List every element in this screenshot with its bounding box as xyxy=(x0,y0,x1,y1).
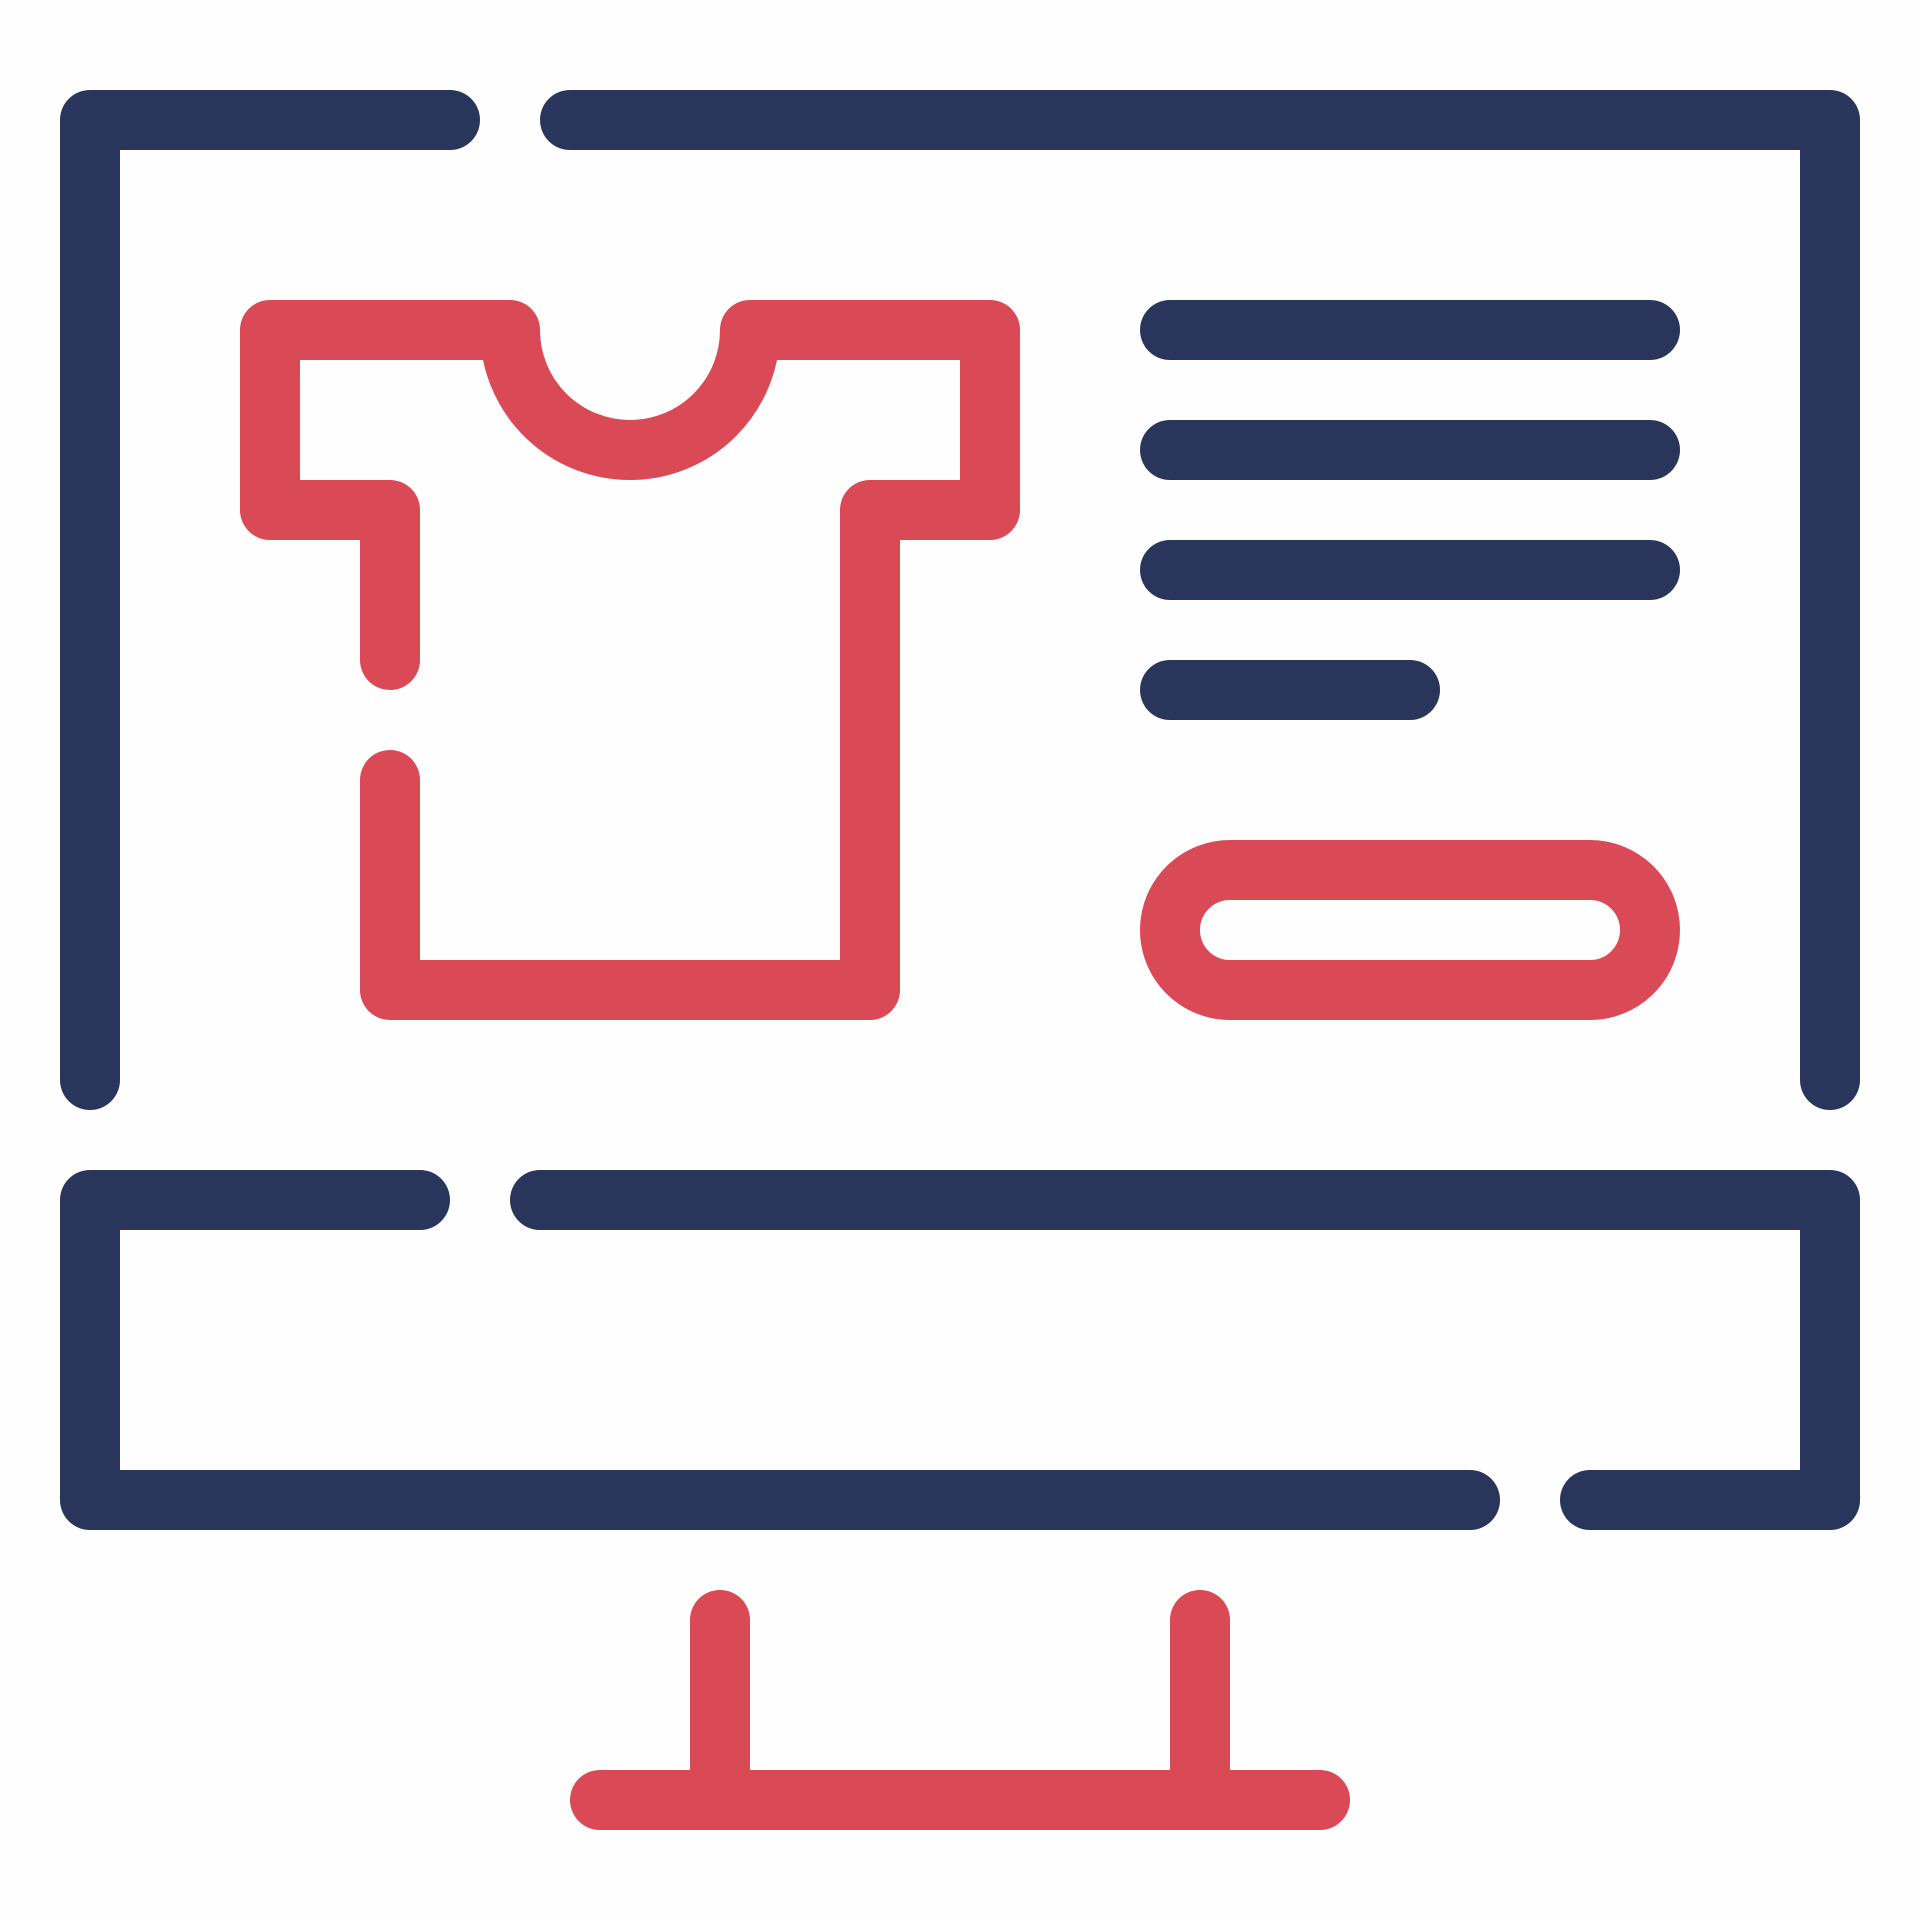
screen frame: right segment xyxy=(570,120,1830,1080)
text line 4 xyxy=(1170,660,1410,720)
bezel: right segment xyxy=(540,1200,1830,1500)
text line 1 xyxy=(1170,300,1650,360)
product description text lines xyxy=(1170,330,1650,690)
monitor bottom bezel xyxy=(90,1200,1830,1500)
bezel: left segment xyxy=(90,1200,1470,1500)
stand: left post xyxy=(690,1620,750,1800)
icon: t-shirt xyxy=(270,330,990,990)
t-shirt: upper outline with collar xyxy=(270,330,990,990)
monitor stand xyxy=(600,1620,1320,1800)
text line 3 xyxy=(1170,540,1650,600)
stand: right post xyxy=(1170,1620,1230,1800)
screen frame: left segment xyxy=(90,120,450,1080)
monitor screen frame xyxy=(90,120,1830,1080)
buy button pill xyxy=(1170,870,1650,990)
text line 2 xyxy=(1170,420,1650,480)
stand: base xyxy=(600,1770,1320,1830)
